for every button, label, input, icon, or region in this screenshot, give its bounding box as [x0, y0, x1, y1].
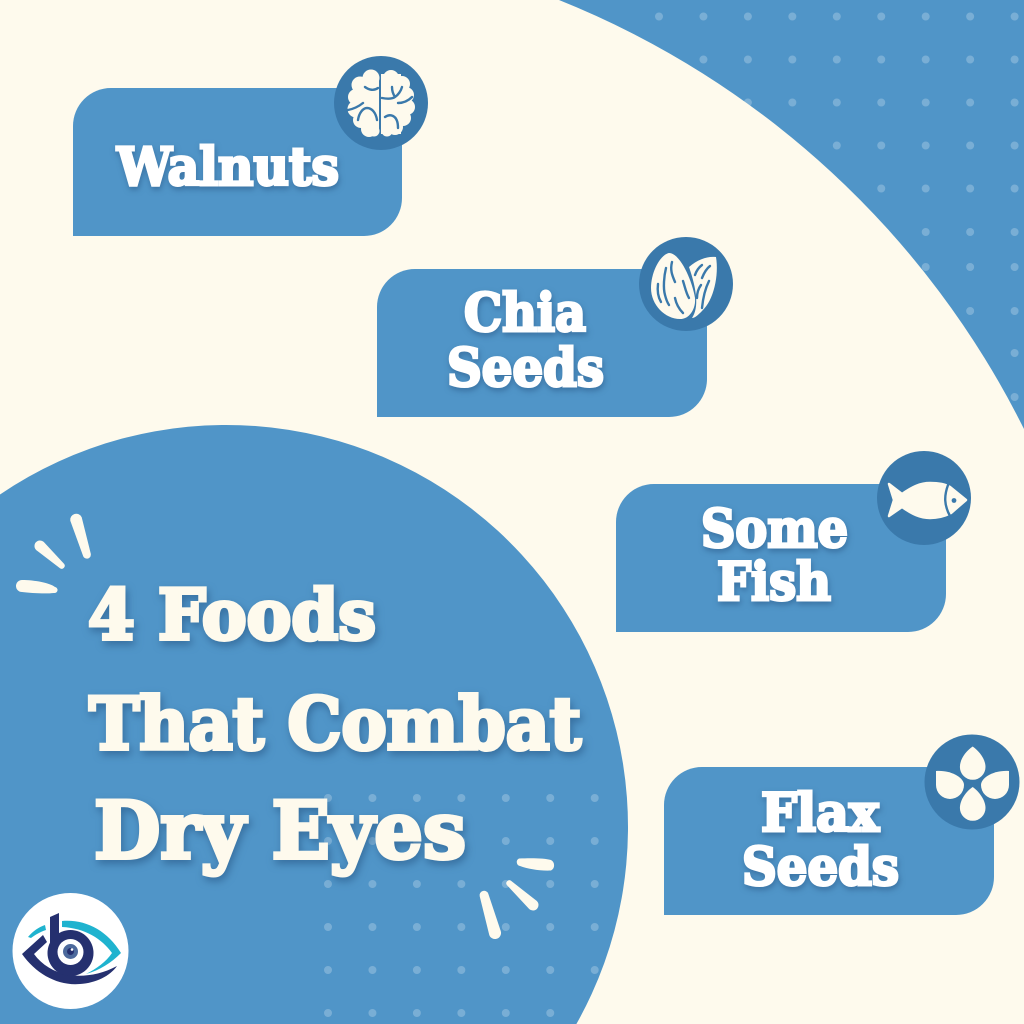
- panel: Chia Seeds: [377, 237, 733, 417]
- label: Some Fish: [701, 499, 848, 613]
- icon: almonds: [639, 237, 733, 331]
- label: Flax Seeds: [742, 783, 899, 898]
- icon: fish: [877, 451, 971, 545]
- title: 4 Foods: [88, 575, 376, 656]
- panel: Walnuts: [73, 56, 428, 236]
- icon: brain: [334, 56, 428, 150]
- label: Some Fish: Some: [701, 499, 848, 560]
- panel: Some Fish: [616, 451, 971, 632]
- title: Dry Eyes: [94, 784, 466, 877]
- logo: [12, 893, 128, 1009]
- label: Chia Seeds: Chia: [464, 283, 586, 344]
- label: Chia Seeds: Seeds: [447, 338, 604, 399]
- panel: title circle: [0, 425, 628, 1024]
- icon: flax drops: [924, 734, 1020, 830]
- label: Chia Seeds: [447, 283, 604, 399]
- title: [88, 575, 581, 877]
- title: That Combat: [89, 681, 581, 766]
- label: Flax Seeds: Seeds: [742, 837, 899, 898]
- label: Flax Seeds: Flax: [761, 783, 880, 844]
- label: Some Fish: Fish: [717, 552, 831, 613]
- icon: sparks upper left: [16, 514, 91, 593]
- icon: sparks lower right: [480, 858, 554, 939]
- panel: Flax Seeds: [664, 734, 1020, 915]
- label: Walnuts: Walnuts: [116, 137, 339, 198]
